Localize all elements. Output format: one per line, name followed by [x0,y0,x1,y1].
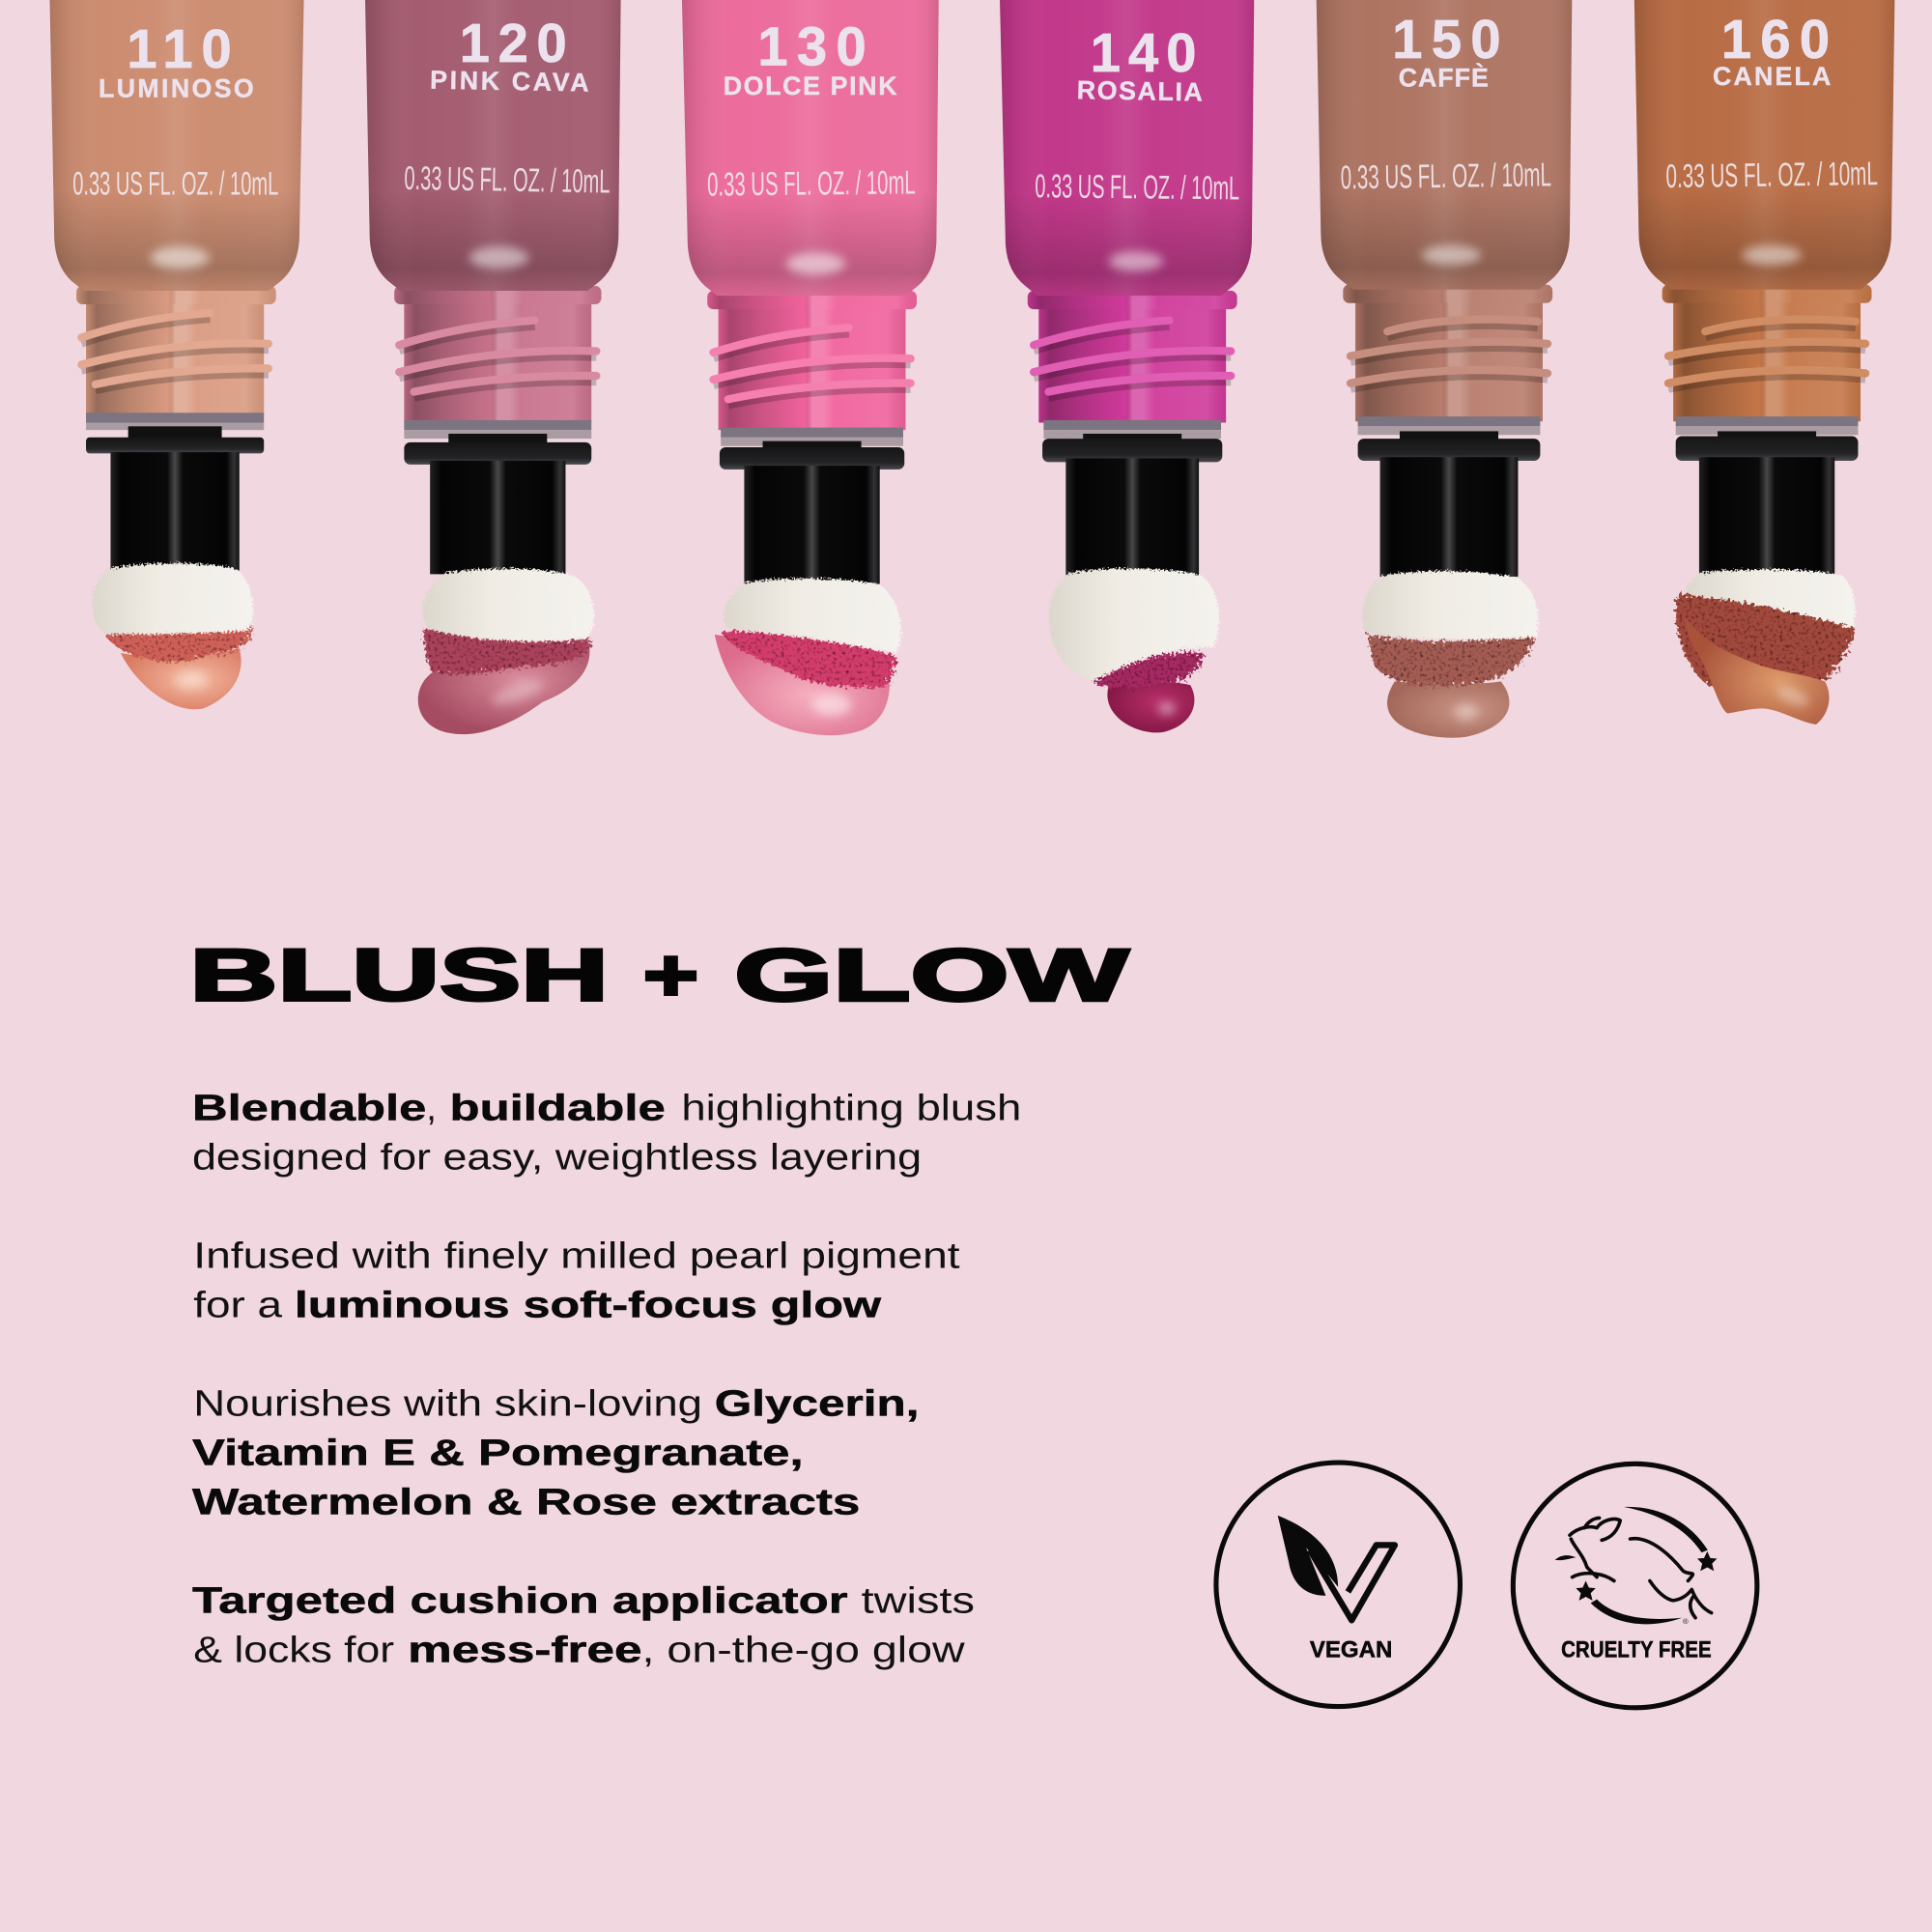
badge: vegan [1216,1463,1460,1707]
title: + [643,935,698,1017]
tube: 120 Pink Cava [365,0,621,734]
badge: cruelty free: ® [1683,1617,1689,1626]
badge: vegan: VEGAN [1310,1637,1392,1663]
tube: 130 Dolce Pink: 0.33 US FL. OZ. / 10mL [707,164,916,204]
tube: 120 Pink Cava: 0.33 US FL. OZ. / 10mL [404,160,611,201]
tube: 130 Dolce Pink: 130 [757,16,867,77]
text block: blendable [192,1087,1021,1178]
tube: 140 Rosalia [999,0,1254,732]
text block: pearl pigment [193,1235,960,1326]
tube: 160 Canela [1634,0,1895,724]
tube: 110 Luminoso [49,0,304,709]
tube: 140 Rosalia: 140 [1091,22,1197,83]
badge: cruelty free [1513,1463,1757,1708]
text block: blendable: highlighting blush [681,1087,1021,1128]
tube: 110 Luminoso: LUMINOSO [99,74,254,103]
text block: nourishes: Watermelon & Rose extracts [192,1482,860,1523]
text block: pearl pigment: Infused with finely milled pearl pigment [193,1235,960,1276]
title: BLUSH [189,935,609,1017]
title [189,935,1130,1017]
text block: nourishes [192,1383,920,1523]
text block: applicator: twists [862,1580,975,1622]
text block: nourishes: Glycerin, [715,1383,920,1425]
text block: applicator [192,1580,975,1671]
text block: blendable: Blendable [192,1087,426,1128]
tube: 150 Caffe: 150 [1392,9,1501,70]
text block: applicator: & locks for [193,1630,394,1671]
text block: applicator: mess-free [408,1630,642,1671]
text block: blendable: designed for easy, weightless layering [192,1136,922,1178]
tube: 150 Caffe: 0.33 US FL. OZ. / 10mL [1341,156,1551,196]
tube: 120 Pink Cava: 120 [460,13,567,73]
tube: 140 Rosalia: 0.33 US FL. OZ. / 10mL [1035,168,1239,207]
tube: 110 Luminoso: 0.33 US FL. OZ. / 10mL [72,166,278,203]
tube: 130 Dolce Pink [681,0,939,735]
text block: applicator: , on-the-go glow [642,1630,965,1671]
text block: applicator: Targeted cushion applicator [192,1580,848,1622]
text block: blendable: , [426,1087,437,1128]
text block: nourishes: Vitamin E & Pomegranate, [192,1433,804,1474]
tube: 160 Canela: CANELA [1713,62,1831,91]
tube: 150 Caffe [1316,0,1573,738]
tube: 140 Rosalia: ROSALIA [1077,75,1203,106]
text block: blendable: buildable [450,1087,666,1128]
text block: pearl pigment: for a [193,1285,283,1326]
badge: cruelty free: CRUELTY FREE [1561,1637,1712,1663]
tube: 120 Pink Cava: PINK CAVA [430,66,589,98]
text block: pearl pigment: luminous soft-focus glow [295,1285,881,1326]
text block: nourishes: Nourishes with skin-loving [193,1383,702,1425]
tube: 160 Canela: 160 [1721,9,1830,70]
tube: 150 Caffe: CAFFÈ [1399,62,1489,92]
tube: 110 Luminoso: 110 [127,18,232,79]
title: GLOW [734,935,1130,1017]
tube: 130 Dolce Pink: DOLCE PINK [724,71,897,100]
